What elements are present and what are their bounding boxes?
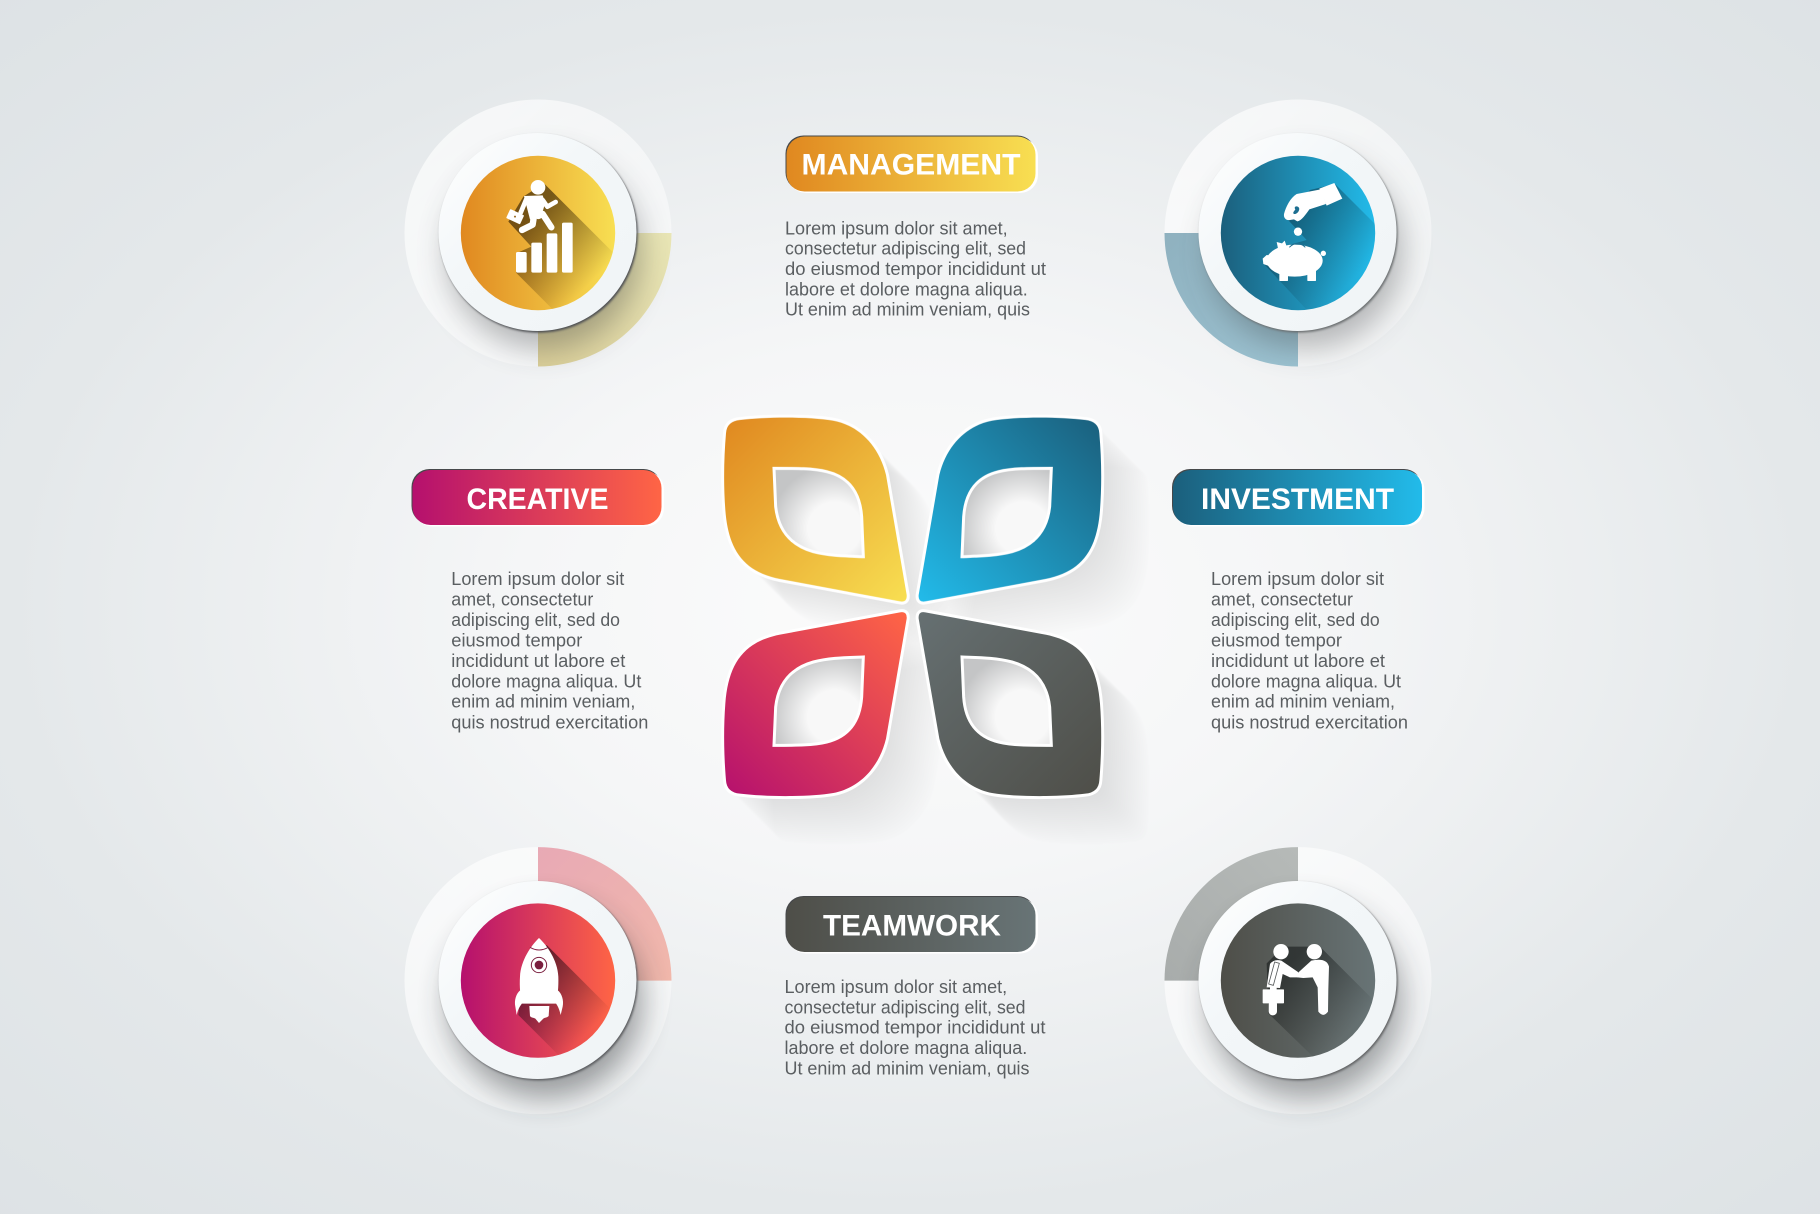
icon: hand dropping coin into piggy bank — [1262, 183, 1375, 308]
label: creative: CREATIVE — [466, 483, 608, 516]
text: investment: enim ad minim veniam, — [1211, 692, 1395, 712]
text: investment: incididunt ut labore et — [1211, 651, 1385, 671]
petal: magenta — [724, 612, 907, 796]
text: investment: adipiscing elit, sed do — [1211, 610, 1380, 630]
quarter arc: teamwork — [1164, 847, 1298, 981]
text: investment: Lorem ipsum dolor sit — [1211, 569, 1384, 589]
text: teamwork — [784, 977, 1046, 1078]
petal: grey — [919, 612, 1101, 796]
circle: investment — [1164, 100, 1432, 366]
label: management — [786, 136, 1038, 193]
text: teamwork: Ut enim ad minim veniam, quis — [784, 1058, 1030, 1078]
text: investment: quis nostrud exercitation — [1211, 712, 1408, 732]
text: management: consectetur adipiscing elit, sed — [785, 239, 1026, 259]
text: creative: adipiscing elit, sed do — [451, 610, 620, 630]
icon: handshake — [1262, 944, 1366, 1050]
text: teamwork: Lorem ipsum dolor sit amet, — [784, 977, 1007, 997]
quarter arc: creative — [538, 847, 672, 981]
text: investment — [1211, 569, 1408, 732]
quarter arc: management — [538, 233, 672, 366]
quarter arc: investment — [1164, 233, 1298, 366]
text: management: Lorem ipsum dolor sit amet, — [785, 218, 1008, 238]
petal: teal — [919, 418, 1101, 602]
text: creative: Lorem ipsum dolor sit — [451, 569, 624, 589]
text: investment: eiusmod tempor — [1211, 630, 1342, 650]
label: teamwork — [786, 896, 1038, 954]
text: creative: eiusmod tempor — [451, 630, 582, 650]
long shadow of petals — [726, 420, 1149, 844]
text: teamwork: do eiusmod tempor incididunt ut — [784, 1018, 1046, 1038]
text: teamwork: consectetur adipiscing elit, sed — [784, 997, 1026, 1017]
circle: management — [404, 100, 672, 366]
icon: rocket — [514, 938, 607, 1054]
text: creative — [451, 569, 648, 732]
text: investment: amet, consectetur — [1211, 590, 1353, 610]
text: management: labore et dolore magna aliqua. — [785, 279, 1028, 299]
text: creative: quis nostrud exercitation — [451, 712, 648, 732]
text: teamwork: labore et dolore magna aliqua. — [784, 1038, 1027, 1058]
text: management — [785, 218, 1046, 320]
flower: four central petals — [724, 418, 1149, 844]
petal: orange — [724, 418, 907, 602]
text: creative: incididunt ut labore et — [451, 651, 625, 671]
circle: creative — [404, 847, 672, 1114]
text: management: do eiusmod tempor incididunt ut — [785, 259, 1046, 279]
label: management: MANAGEMENT — [802, 148, 1020, 182]
label: investment: INVESTMENT — [1201, 483, 1394, 516]
text: investment: dolore magna aliqua. Ut — [1211, 671, 1401, 691]
label: teamwork: TEAMWORK — [823, 910, 1001, 942]
circle: teamwork — [1164, 847, 1432, 1114]
icon: runner climbing bar chart — [506, 180, 612, 308]
text: creative: amet, consectetur — [451, 590, 593, 610]
label: creative — [412, 469, 664, 526]
text: creative: enim ad minim veniam, — [451, 692, 635, 712]
text: creative: dolore magna aliqua. Ut — [451, 671, 641, 691]
label: investment — [1172, 469, 1424, 526]
text: management: Ut enim ad minim veniam, quis — [785, 300, 1030, 320]
